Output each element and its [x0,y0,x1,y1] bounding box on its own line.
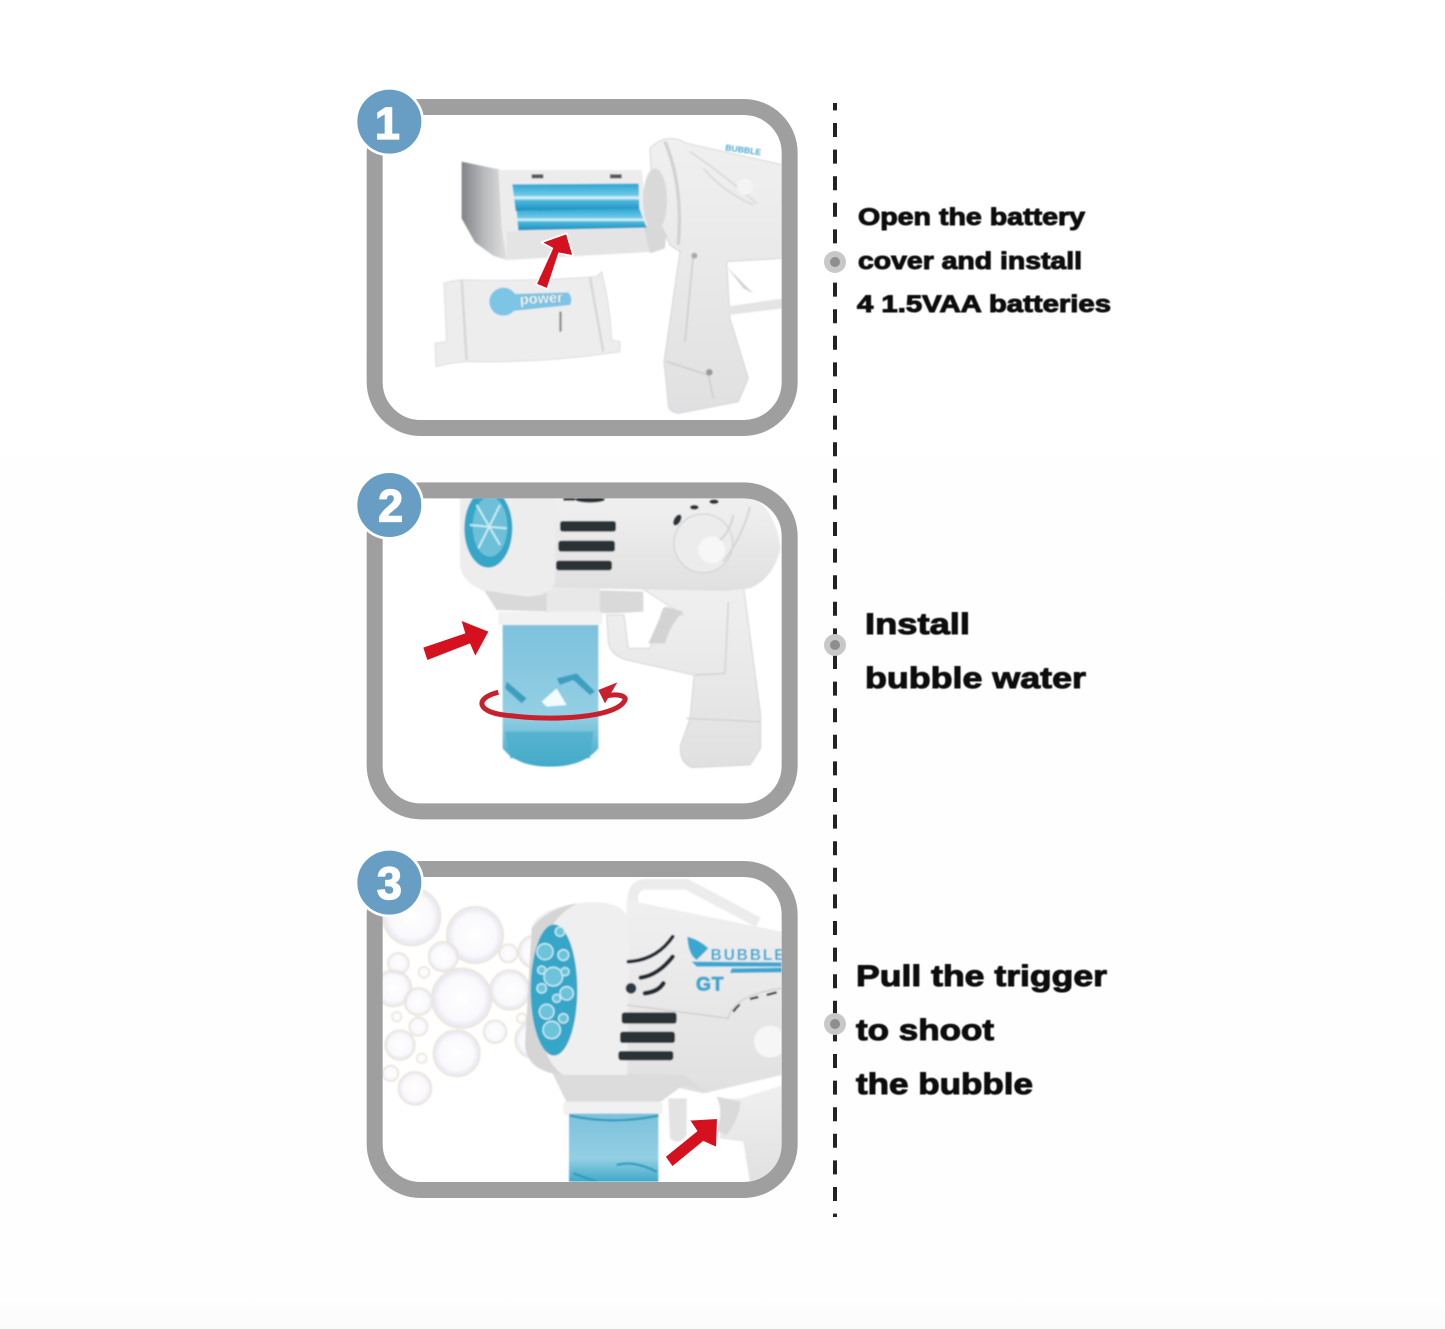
panel 3 frame [375,869,790,1190]
step 1 text: 4 1.5VAA batteries [857,291,1111,318]
red arrow: insert cover [536,233,573,289]
step 2 text: Install [865,608,970,641]
red arrow: pull trigger [665,1118,718,1167]
illustration: gun with bottle [460,489,781,768]
panel 3 background [383,877,782,1182]
dashed timeline with markers [824,103,846,1217]
panel 2 frame [375,490,790,811]
product logo: BUBBLEG [711,947,800,964]
step 2 text [865,608,1086,695]
badge 2 [356,472,423,538]
red arrow: insert bottle [423,621,488,660]
step 3 text: Pull the trigger [856,960,1107,993]
vents [618,1012,677,1060]
panel 1 background [383,115,782,420]
infographic canvas [357,90,1112,1217]
illustration: gun shooting bubbles [375,884,800,1182]
vents [556,521,616,570]
step 1 text [857,204,1111,318]
step 2 text: bubble water [865,662,1086,695]
dark slashes [628,937,673,993]
badge 2: 2 [378,481,403,532]
panel 2: install bubble water [356,472,790,811]
carry handle [633,884,758,922]
step 3 text: the bubble [856,1068,1033,1101]
step 1 text: Open the battery [858,204,1086,231]
product logo [686,936,782,992]
step 3 text [856,960,1107,1101]
badge 3: 3 [377,858,402,909]
marker 1 [824,251,846,273]
step 3 text: to shoot [856,1014,994,1047]
panel 1: install batteries [356,88,790,428]
power label [489,288,571,316]
red rotation arrow [482,682,625,718]
power label: power [519,290,564,308]
badge 1: 1 [375,98,400,149]
panel 2 background [383,498,782,803]
marker 2 [824,634,846,656]
step 1 text: cover and install [858,248,1082,275]
panel 3: shoot bubbles [356,849,800,1190]
badge 3 [356,849,423,916]
panel 1 frame [375,107,790,428]
gun logo text: BUBBLE [725,142,762,157]
illustration: open battery compartment and cover [435,139,783,413]
bubbles [382,889,532,1106]
marker 3 [824,1013,846,1035]
badge 1 [356,88,423,155]
product logo: GT [696,974,724,995]
